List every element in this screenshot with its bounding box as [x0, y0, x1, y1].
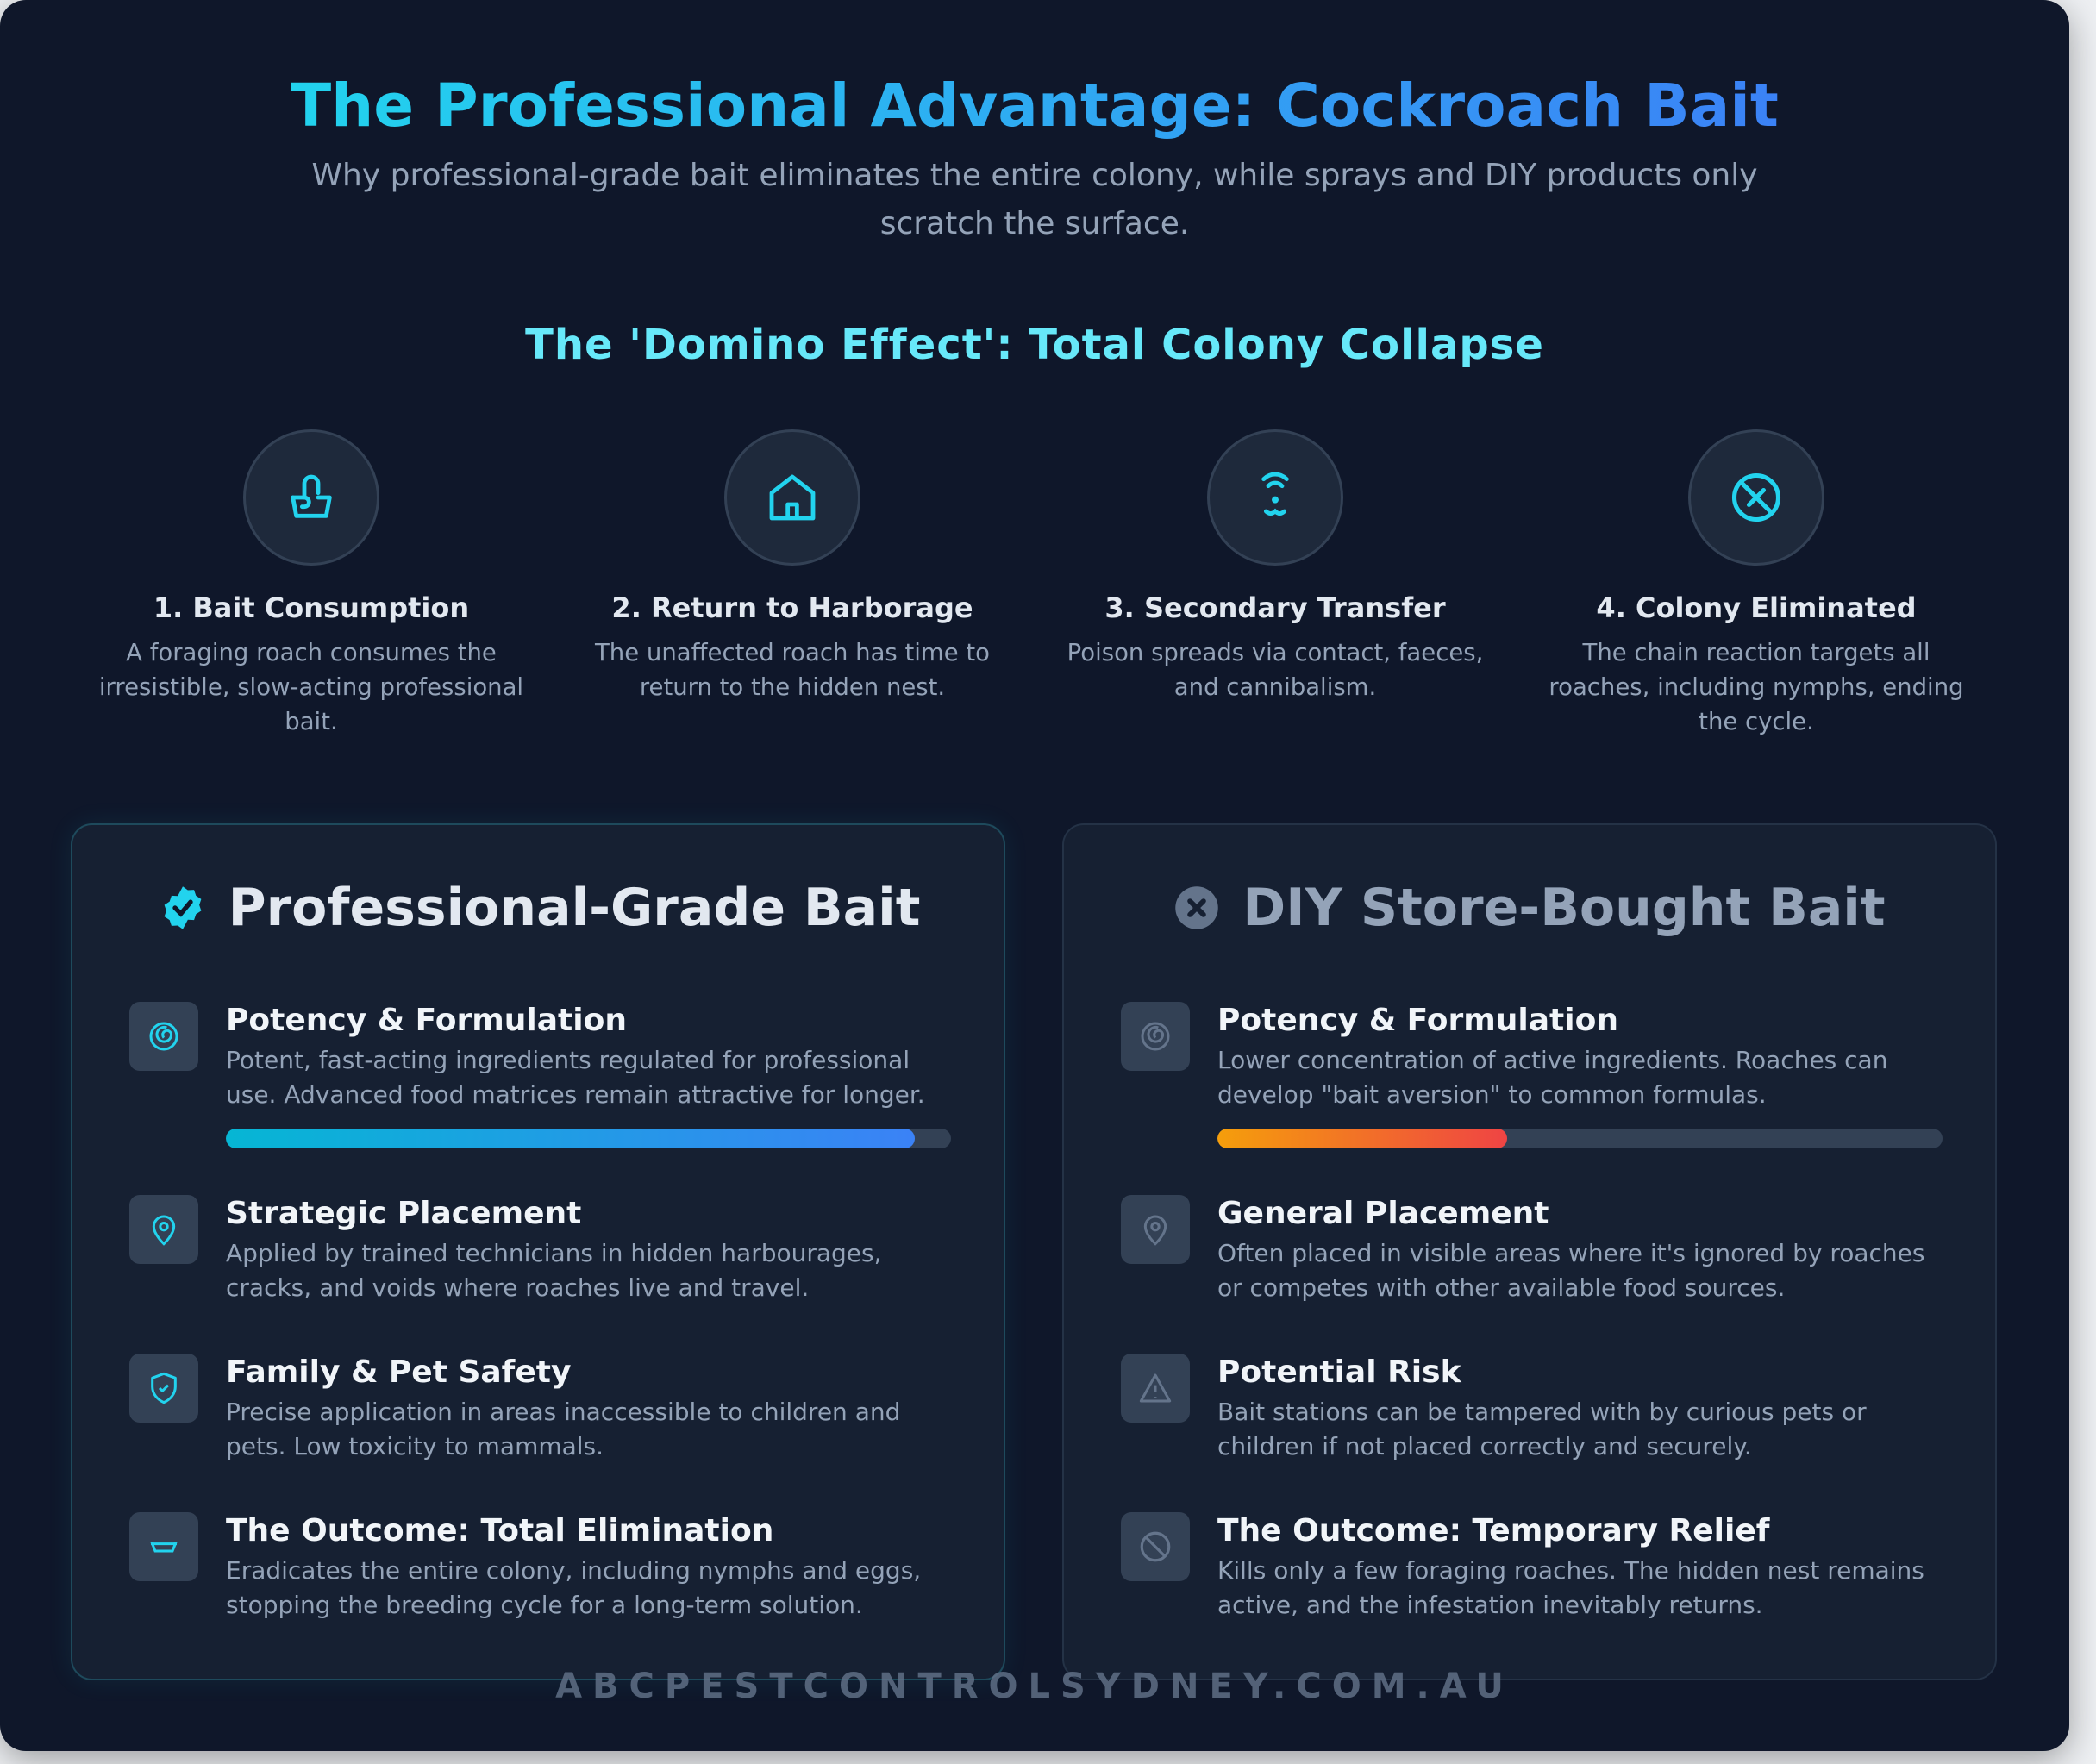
- icon: house: [724, 429, 860, 566]
- item: outcome: stopping the breeding cycle for a long-term solution.: [226, 1591, 863, 1619]
- item: safety: pets. Low toxicity to mammals.: [226, 1432, 604, 1461]
- item: potency: Lower concentration of active ingredients. Roaches can: [1217, 1046, 1887, 1074]
- item: outcome: The Outcome: Temporary Relief: [1217, 1513, 1769, 1548]
- step 4: [1549, 429, 1964, 735]
- panel: DIY: [1062, 823, 1997, 1680]
- item: outcome: [129, 1512, 921, 1619]
- item: outcome: active, and the infestation inevitably returns.: [1217, 1591, 1763, 1619]
- item: outcome: [1121, 1512, 1924, 1619]
- step 1: [99, 429, 523, 735]
- item: placement: Strategic Placement: [226, 1196, 581, 1231]
- card heading: DIY Store-Bought Bait: [1242, 878, 1886, 938]
- item: risk: children if not placed correctly and securely.: [1217, 1432, 1752, 1461]
- icon: transfer: [1207, 429, 1343, 566]
- step 2: [595, 429, 990, 701]
- step text: 4. Colony Eliminated: [1596, 591, 1917, 624]
- item: outcome: Eradicates the entire colony, including nymphs and eggs,: [226, 1556, 921, 1585]
- footer: website: ABCPESTCONTROLSYDNEY.COM.AU: [555, 1667, 1514, 1706]
- item: risk: Potential Risk: [1217, 1354, 1461, 1390]
- step 3: [1067, 429, 1483, 701]
- section heading: The 'Domino Effect': Total Colony Collapse: [525, 321, 1544, 369]
- item: potency: develop "bait aversion" to common formulas.: [1217, 1080, 1767, 1109]
- icon: bait: [243, 429, 379, 566]
- item: potency: use. Advanced food matrices remain attractive for longer.: [226, 1080, 925, 1109]
- step text: Poison spreads via contact, faeces, and cannibalism.: [1067, 639, 1483, 701]
- item: outcome: Kills only a few foraging roaches. The hidden nest remains: [1217, 1556, 1924, 1585]
- panel: professional: [71, 823, 1005, 1680]
- step text: 3. Secondary Transfer: [1104, 591, 1446, 624]
- step text: [1549, 591, 1964, 735]
- item: placement: cracks, and voids where roaches live and travel.: [226, 1273, 809, 1302]
- item: risk: [1121, 1354, 1867, 1461]
- title: The Professional Advantage: Cockroach Bait: [291, 72, 1779, 141]
- item: safety: Precise application in areas inaccessible to children and: [226, 1398, 900, 1426]
- item: placement: [129, 1195, 882, 1302]
- subtitle: Why professional-grade bait eliminates the entire colony, while sprays and DIY products only scratch the surface.: [311, 158, 1758, 241]
- step text: A foraging roach consumes the irresistible, slow-acting professional bait.: [99, 639, 523, 735]
- item: placement: General Placement: [1217, 1196, 1549, 1231]
- step text: [99, 591, 523, 735]
- step text: 1. Bait Consumption: [153, 591, 469, 624]
- item: outcome: The Outcome: Total Elimination: [226, 1513, 773, 1548]
- step text: 2. Return to Harborage: [611, 591, 973, 624]
- item: potency: [129, 1002, 951, 1148]
- step text: The chain reaction targets all roaches, including nymphs, ending the cycle.: [1549, 639, 1964, 735]
- item: placement: or competes with other available food sources.: [1217, 1273, 1785, 1302]
- item: placement: Often placed in visible areas where it's ignored by roaches: [1217, 1239, 1924, 1267]
- step text: [595, 591, 990, 701]
- item: potency: Potency & Formulation: [226, 1003, 627, 1038]
- step text: The unaffected roach has time to return to the hidden nest.: [595, 639, 990, 701]
- card heading: Professional-Grade Bait: [228, 878, 920, 938]
- step text: [1067, 591, 1483, 701]
- item: placement: Applied by trained technicians in hidden harbourages,: [226, 1239, 882, 1267]
- item: safety: [129, 1354, 900, 1461]
- item: potency: [1121, 1002, 1943, 1148]
- item: potency: Potency & Formulation: [1217, 1003, 1618, 1038]
- item: risk: Bait stations can be tampered with by curious pets or: [1217, 1398, 1867, 1426]
- item: potency: Potent, fast-acting ingredients regulated for professional: [226, 1046, 910, 1074]
- item: placement: [1121, 1195, 1924, 1302]
- item: safety: Family & Pet Safety: [226, 1354, 571, 1390]
- icon: eliminated: [1688, 429, 1824, 566]
